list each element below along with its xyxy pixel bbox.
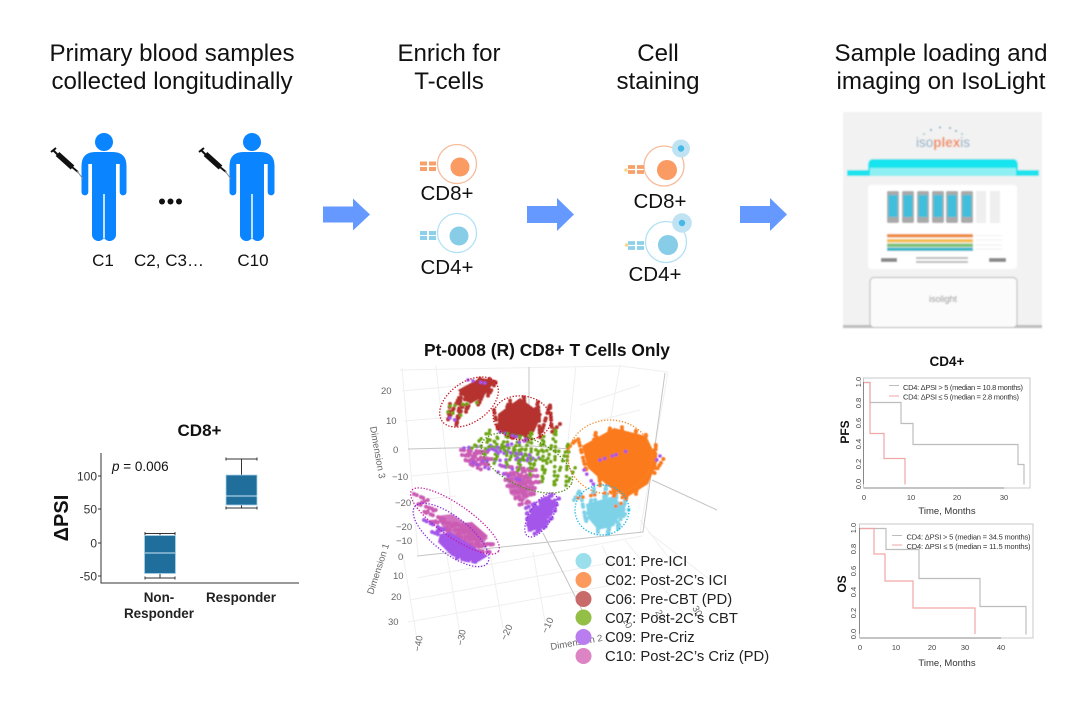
y axis title: ΔPSI [51,495,73,541]
x ticks: 10 [892,643,900,652]
chart: box plot of delta PSI [51,453,299,621]
label: stained CD4+: CD4+ [629,263,681,286]
y axis ticks: 0 [90,536,97,550]
box: non-responder [144,532,176,580]
dotted cluster outlines [402,367,652,578]
axis tick labels: 0 [398,552,403,563]
axis tick labels: Dimension 2 [550,633,604,653]
chart: PFS survival curves: CD4: ΔPSI > 5 (median = 10.8 months) [903,383,1024,392]
points: pink cluster [414,450,540,552]
x ticks: 0 [862,493,866,502]
legend: C06: Pre-CBT (PD) [605,592,732,608]
chart: PFS survival curves: Time, Months [918,506,976,517]
x ticks: 30 [1000,493,1008,502]
legend [576,553,769,665]
x ticks: 40 [997,643,1005,652]
icon: stained CD4 cell [625,213,692,262]
chart: 3D scatter plot [365,365,717,653]
axis tick labels: −10 [396,536,412,547]
y ticks: 0.8 [854,398,863,408]
x ticks: 30 [961,643,969,652]
label: CD8+: CD8+ [421,182,473,205]
icon: patient C10 with syringe [199,133,274,241]
y axis ticks [77,470,97,584]
chart: OS survival curves: CD4: ΔPSI ≤ 5 (median = 11.5 months) [906,542,1031,551]
chart: PFS survival curves: CD4: ΔPSI ≤ 5 (median = 2.8 months) [903,392,1020,402]
axis tick labels: 10 [386,416,397,427]
y ticks [849,523,858,639]
y ticks: 0.0 [849,629,858,639]
chart title: t-SNE scatter: Pt-0008 (R) CD8+ T Cells Only [424,340,670,360]
axis tick labels: −30 [455,629,469,647]
y ticks: 1.0 [849,523,858,533]
chart: OS survival curves: CD4: ΔPSI > 5 (median = 34.5 months) [906,532,1031,542]
x ticks: 20 [928,643,936,652]
grid [400,365,713,640]
axis tick labels: −20 [395,498,411,509]
arrow 3 [740,198,787,231]
text: C1: C1 [92,251,114,270]
axis tick labels: 20 [652,608,667,623]
x ticks [862,493,1008,502]
y ticks: 0.2 [849,608,858,618]
x ticks: 0 [858,643,862,652]
axis tick labels: −40 [412,635,426,653]
y ticks: 0.4 [854,439,863,449]
device logo: isoplexis [916,135,970,150]
y ticks: 0.6 [854,418,863,428]
y axis ticks: 100 [77,470,97,484]
legend: C10: Post-2C’s Criz (PD) [605,649,769,665]
icon: ellipsis dots [159,198,182,204]
heading: sample loading and imaging: imaging on IsoLight [837,68,1046,95]
axis tick labels: −20 [396,522,412,533]
axis tick labels: 30 [689,604,704,619]
p value: p = 0.006 [111,459,169,474]
points: purple clusters [424,445,560,562]
chart: OS survival curves [835,523,1033,669]
y ticks: 1.0 [854,377,863,387]
heading: cell staining: Cell [637,40,679,67]
y ticks: 0.0 [854,479,863,489]
heading: enrich for T-cells: Enrich for [397,40,501,67]
category labels: Responder [206,590,277,605]
chart title: CD4+: CD4+ [930,354,965,369]
arrow 2 [527,198,574,231]
points: orange cluster [568,427,664,500]
chart title: CD8+: CD8+ [178,421,222,440]
axis tick labels: 30 [388,617,399,628]
chart: OS survival curves: Time, Months [918,658,976,669]
icon: CD8 cell [420,144,476,184]
axis tick labels: −10 [392,472,408,483]
axis tick labels: −20 [499,623,516,642]
heading: sample loading and imaging: Sample loading and [834,40,1048,67]
axis tick labels: Dimension 1 [365,542,392,596]
heading: cell staining: staining [616,68,700,95]
category labels: Responder [124,606,195,621]
legend: C09: Pre-Criz [605,630,695,646]
axis titles: PFS [838,420,852,444]
axis tick labels: 0 [393,445,398,456]
axis tick labels [365,386,704,653]
legend [889,384,899,386]
x ticks [858,643,1005,652]
y axis ticks: -50 [80,570,97,584]
box: responder [226,458,257,510]
points: dark red clusters [448,378,560,442]
axis tick labels: −10 [540,616,557,635]
arrow 1 [323,198,370,230]
points: cyan cluster [574,486,630,536]
x ticks: 10 [907,493,915,502]
legend: C07: Post-2C’s CBT [605,611,738,627]
icon: CD4 cell [420,214,476,252]
device name: isolight [929,294,958,304]
axis tick labels: 10 [619,616,634,631]
axis titles: OS [835,575,849,593]
heading: primary blood samples: Primary blood samples [49,40,295,67]
y ticks: 0.4 [849,587,858,597]
x ticks: 20 [953,493,961,502]
text: C2, C3: C2, C3… [134,251,204,270]
y ticks: 0.6 [849,566,858,576]
icon: patient C1 with syringe [51,133,126,241]
icon: stained CD8 cell [624,140,690,186]
legend: C02: Post-2C’s ICI [605,573,727,589]
y ticks [854,377,863,489]
chart: PFS survival curves [838,377,1030,517]
legend: C01: Pre-ICI [605,554,687,570]
y ticks: 0.8 [849,544,858,554]
scattered points: mixed colours [450,380,660,488]
panel: IsoLight instrument [843,112,1042,328]
points: green cluster [448,402,576,488]
text: C10: C10 [237,251,269,270]
heading: enrich for T-cells: T-cells [414,68,484,95]
points: all clusters [414,378,664,562]
heading: primary blood samples: collected longitudinally [51,68,293,95]
category labels [124,590,277,621]
y axis ticks: 50 [84,502,97,516]
axis tick labels: 20 [391,592,402,603]
axis tick labels: 10 [393,571,404,582]
axis tick labels: 20 [381,386,392,397]
category labels: Non- [144,590,174,605]
legend [892,534,902,536]
axis tick labels: Dimension 3 [367,426,387,480]
y ticks: 0.2 [854,459,863,469]
label: stained CD8+: CD8+ [634,190,686,213]
label: CD4+: CD4+ [421,256,473,279]
